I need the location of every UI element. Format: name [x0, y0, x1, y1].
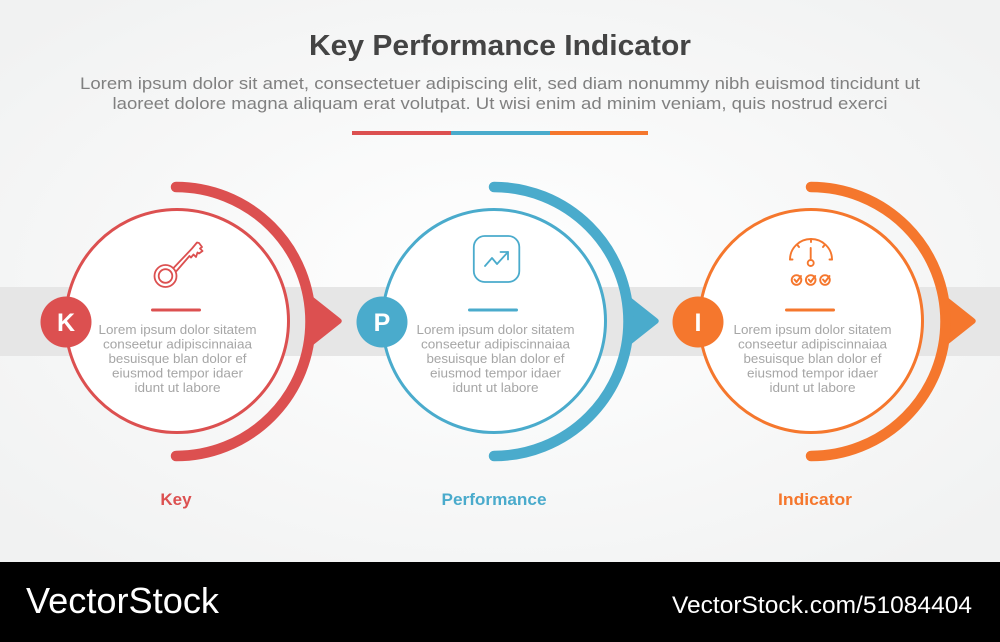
badge: I	[672, 296, 724, 348]
footer logo: VectorStock	[26, 580, 220, 621]
icon: key	[154, 242, 202, 287]
footer bar	[0, 562, 1000, 642]
body text: indicator	[734, 323, 892, 395]
body text: key: conseetur adipiscinnaiaa	[103, 338, 252, 352]
label: Performance: Performance	[442, 490, 546, 509]
outer arc: performance	[494, 187, 628, 456]
outer arc: key	[176, 187, 310, 456]
icon: chart	[474, 236, 519, 282]
circle: performance	[382, 210, 606, 432]
label: Indicator: Indicator	[778, 490, 852, 509]
outer arc: indicator	[811, 187, 946, 456]
panel: performance	[356, 187, 658, 509]
body text: indicator: idunt ut labore	[770, 381, 856, 395]
footer url: VectorStock.com/51084404	[672, 592, 972, 619]
subtitle text: laoreet dolore magna aliquam erat volutpat. Ut wisi enim ad minim veniam, quis nostrud exerci	[112, 94, 888, 113]
badge: P: P	[374, 309, 390, 337]
accent line: performance	[468, 308, 518, 312]
body text: key: besuisque blan dolor ef	[108, 352, 247, 366]
body text: key	[98, 323, 256, 395]
icon: gauge	[790, 239, 832, 285]
body text: key: eiusmod tempor idaer	[112, 366, 243, 380]
accent line: indicator	[785, 308, 835, 312]
badge: I: I	[695, 309, 701, 337]
subtitle text: Lorem ipsum dolor sit amet, consectetuer adipiscing elit, sed diam nonummy nibh euismod tincidunt ut	[80, 74, 920, 93]
arrow: key	[313, 298, 341, 344]
body text: indicator: eiusmod tempor idaer	[747, 366, 878, 380]
arrow: performance	[630, 298, 658, 344]
body text: performance: conseetur adipiscinnaiaa	[421, 338, 570, 352]
body text: indicator: besuisque blan dolor ef	[744, 352, 882, 366]
body text: performance: besuisque blan dolor ef	[426, 352, 565, 366]
panel: indicator	[672, 187, 975, 509]
body text: performance: idunt ut labore	[452, 381, 539, 395]
badge: K: K	[57, 309, 75, 337]
badge: K	[40, 296, 92, 348]
body text: key: Lorem ipsum dolor sitatem	[98, 323, 256, 337]
tricolor divider	[352, 131, 648, 135]
body text: indicator: Lorem ipsum dolor sitatem	[734, 323, 892, 337]
body text: indicator: conseetur adipiscinnaiaa	[738, 338, 887, 352]
body text: performance: Lorem ipsum dolor sitatem	[416, 323, 574, 337]
circle: key	[66, 210, 288, 432]
body text: performance: eiusmod tempor idaer	[430, 366, 561, 380]
body text: performance	[416, 323, 574, 395]
arrow: indicator	[947, 298, 975, 344]
label: Key: Key	[160, 490, 192, 509]
subtitle text	[80, 74, 920, 113]
circle: indicator	[700, 210, 922, 432]
body text: key: idunt ut labore	[134, 381, 221, 395]
accent line: key	[151, 308, 201, 312]
title: Key Performance Indicator	[309, 30, 691, 62]
badge: P	[356, 296, 408, 348]
panel: key	[40, 187, 341, 509]
